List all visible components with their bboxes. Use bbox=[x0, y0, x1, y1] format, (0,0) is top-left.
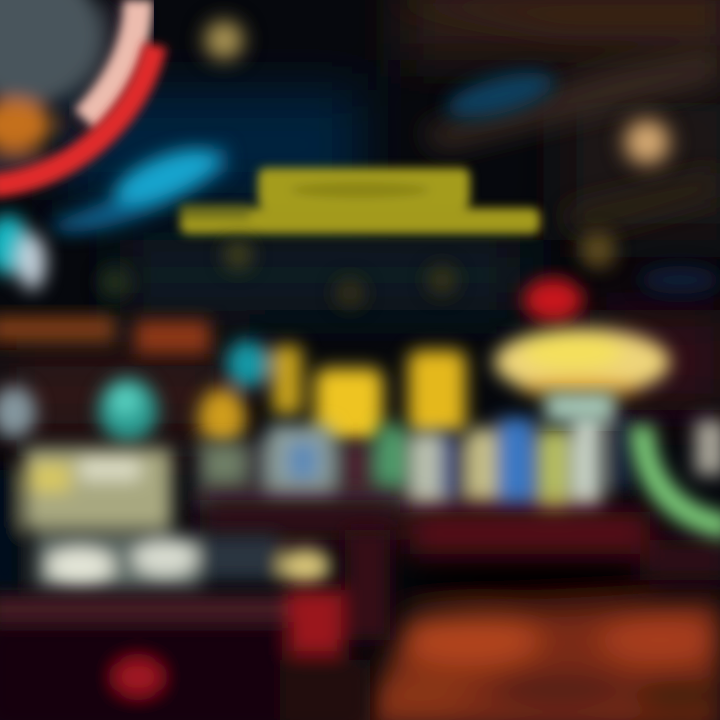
slot machines row bbox=[195, 340, 720, 580]
pale column bbox=[545, 392, 615, 422]
ceiling lights bbox=[200, 16, 675, 268]
orange wall band bbox=[0, 316, 210, 354]
machine screens bbox=[195, 412, 720, 513]
ceiling ball: top-left globe with red and white ring bbox=[0, 0, 155, 186]
red top bbox=[523, 278, 583, 322]
left teal lamp and pale lamp bbox=[0, 378, 158, 442]
sign lower line bbox=[180, 208, 540, 234]
left cyan and white lamp bbox=[0, 215, 46, 290]
white ring band bbox=[85, 0, 138, 120]
sign upper line bbox=[258, 168, 470, 208]
carousel centrepiece bbox=[494, 278, 670, 422]
ceiling and wall tones bbox=[0, 0, 720, 440]
dim mid-room lights bbox=[100, 240, 720, 308]
red ring band bbox=[0, 45, 155, 186]
machine bases bbox=[200, 500, 720, 580]
globe body bbox=[0, 0, 146, 179]
yellow sign bbox=[180, 168, 540, 234]
foreground red counter bbox=[0, 530, 390, 720]
floor bbox=[360, 558, 720, 720]
ceiling beams bbox=[380, 0, 720, 235]
yellow canopy bbox=[494, 328, 670, 397]
foreground slot machine screen bbox=[0, 448, 331, 590]
machine toppers bbox=[198, 340, 466, 448]
blue ceiling streaks bbox=[50, 63, 558, 232]
green tube arc bbox=[642, 425, 720, 527]
